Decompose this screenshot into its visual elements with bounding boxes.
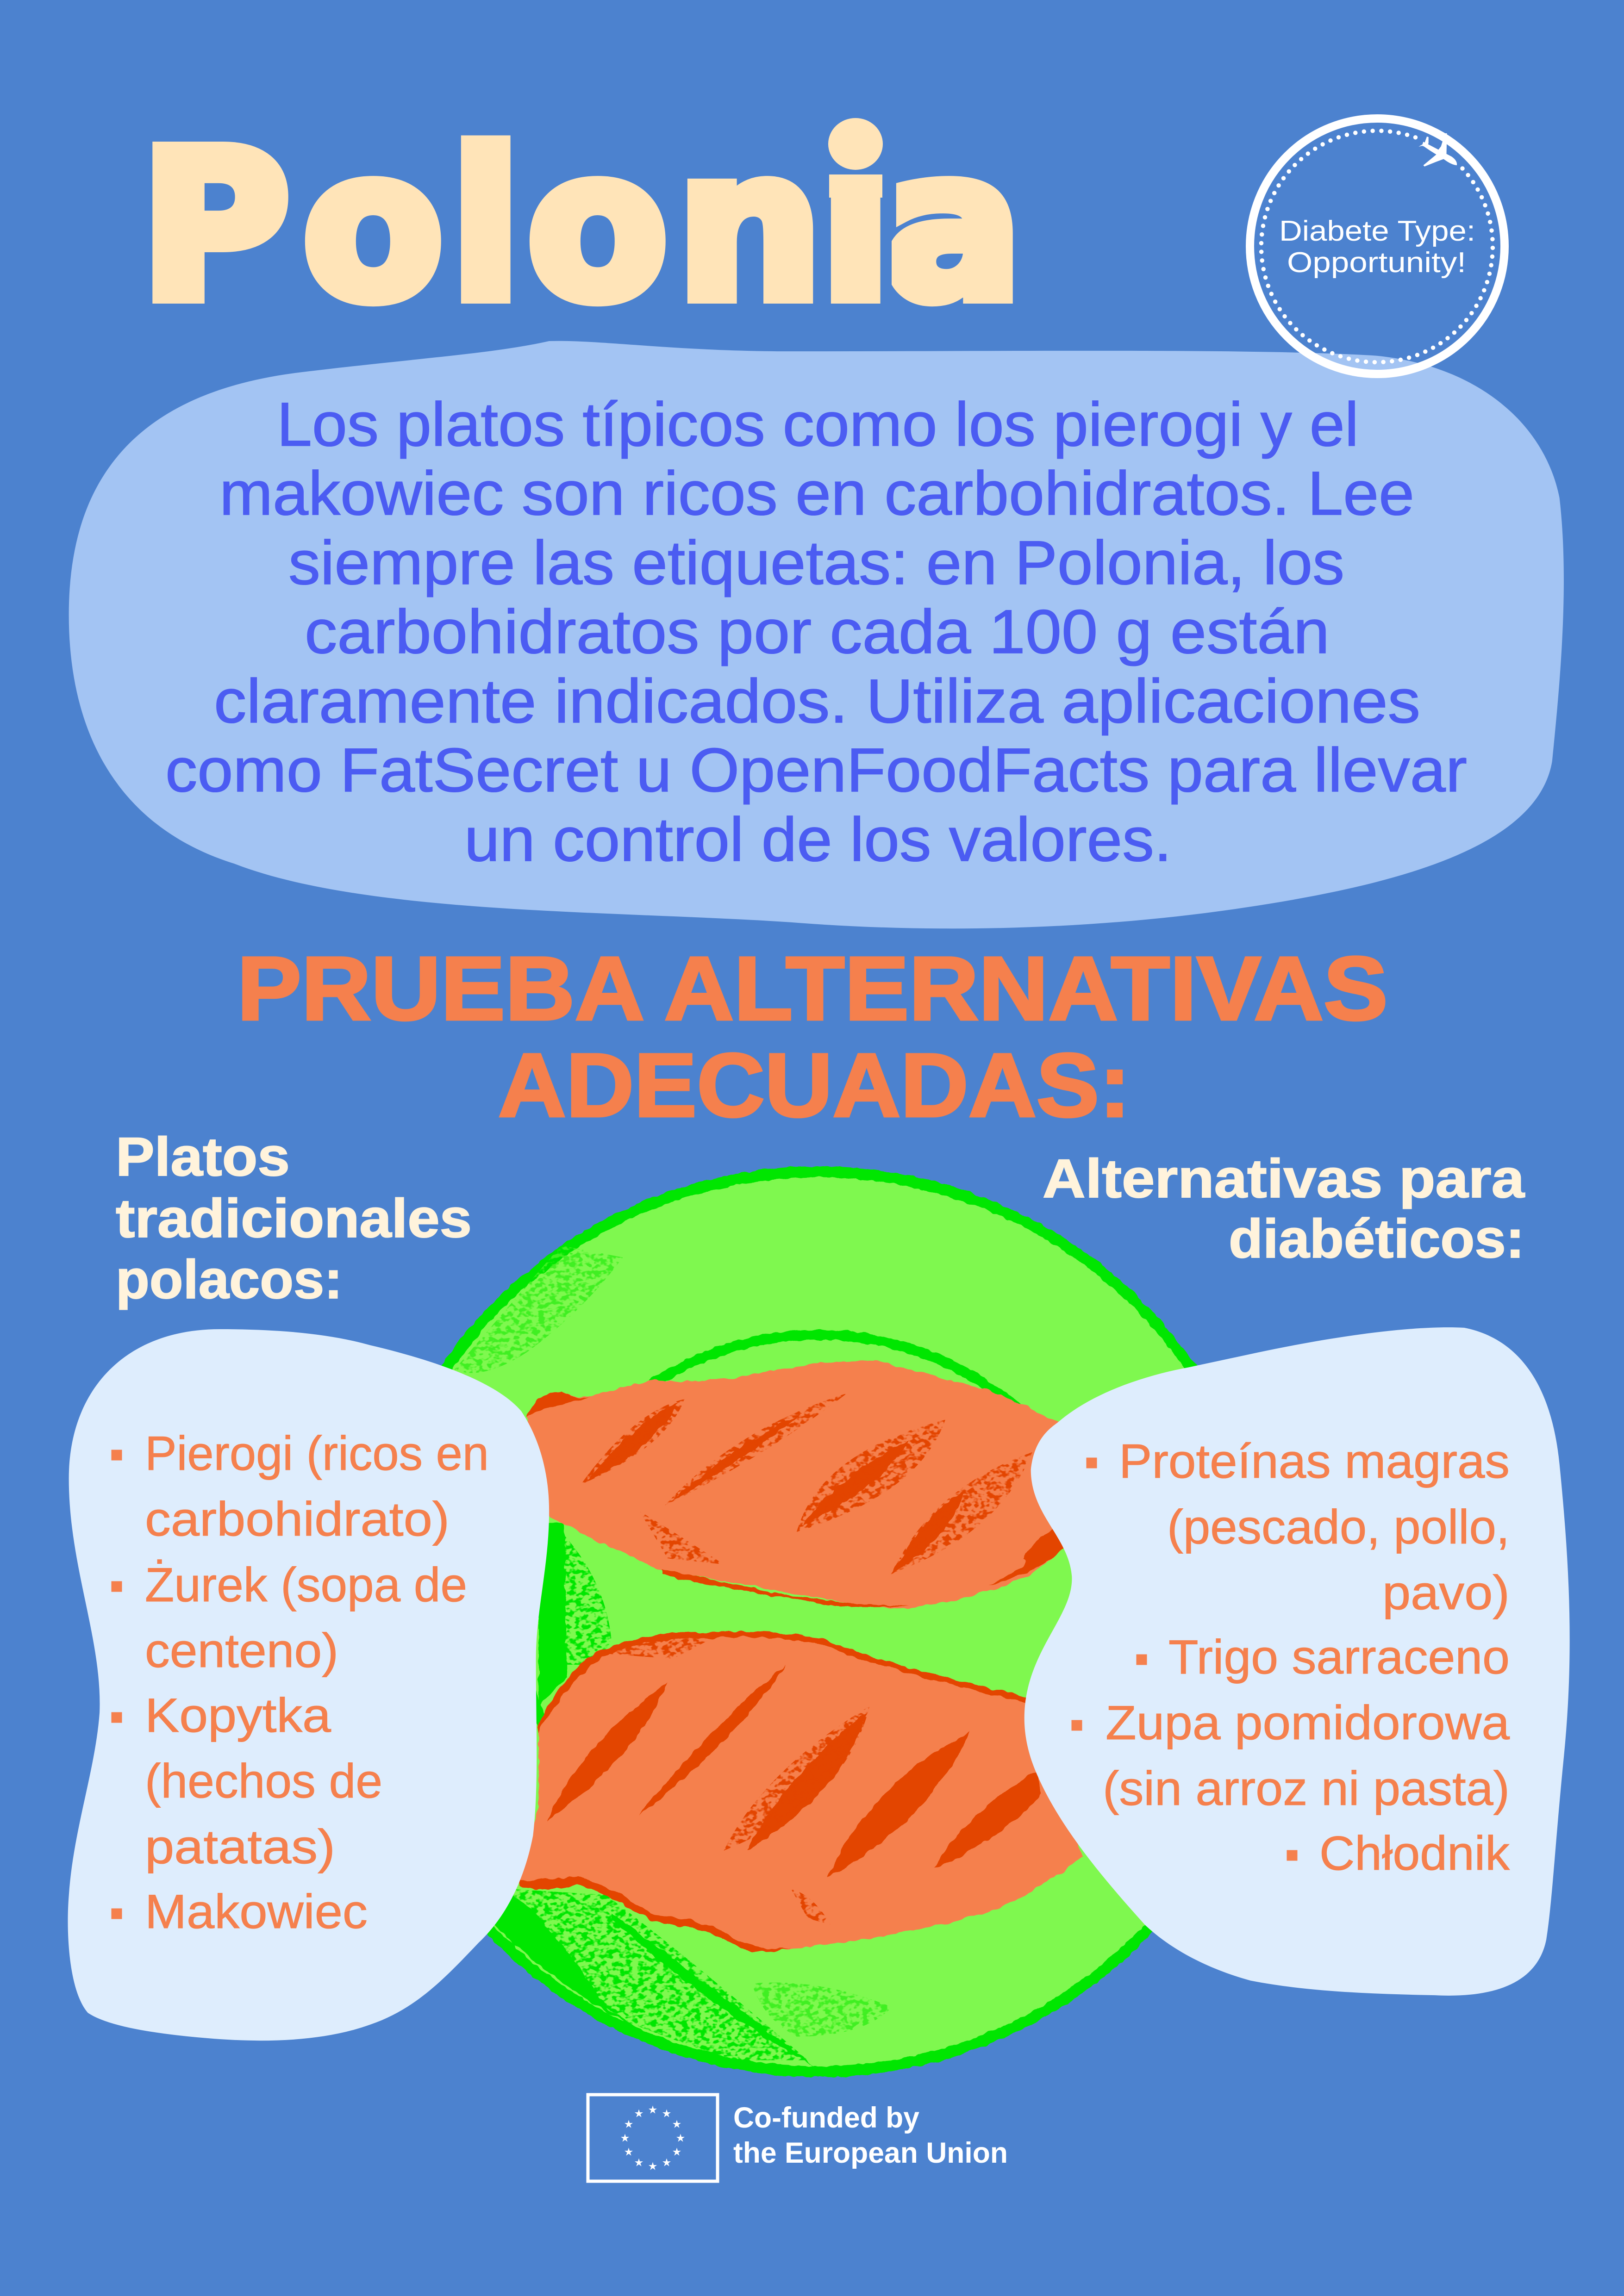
heading: traditional dishes: polacos: bbox=[116, 1249, 343, 1310]
icon: airplane bbox=[1418, 133, 1457, 167]
list: traditional dishes: patatas) bbox=[145, 1820, 335, 1874]
list: alternatives: (sin arroz ni pasta) bbox=[1103, 1762, 1510, 1816]
intro paragraph: Los platos típicos como los pierogi y el bbox=[277, 390, 1359, 459]
icon: EU flag bbox=[588, 2095, 718, 2181]
list: alternatives: pavo) bbox=[1382, 1566, 1510, 1620]
list: traditional dishes: carbohidrato) bbox=[145, 1493, 450, 1546]
badge text: Diabete Type: bbox=[1279, 215, 1475, 247]
title: Polonia bbox=[141, 108, 1022, 345]
EU funding text bbox=[733, 2102, 1008, 2169]
heading: traditional dishes bbox=[116, 1126, 472, 1310]
intro paragraph: carbohidratos por cada 100 g están bbox=[305, 597, 1330, 666]
intro paragraph: un control de los valores. bbox=[464, 805, 1172, 874]
list: alternatives: Zupa pomidorowa bbox=[1106, 1696, 1510, 1750]
illustration: plate with chicken bbox=[362, 1166, 1274, 2077]
chicken top bbox=[526, 1361, 1066, 1609]
list: traditional dishes: Makowiec bbox=[145, 1885, 368, 1939]
panel: intro text bbox=[69, 341, 1564, 928]
heading: traditional dishes: tradicionales bbox=[116, 1188, 472, 1249]
chicken bottom bbox=[519, 1631, 1083, 1952]
panel: traditional dishes list bbox=[68, 1329, 549, 2041]
EU funding text: the European Union bbox=[733, 2137, 1008, 2169]
list: alternatives: Proteínas magras bbox=[1119, 1435, 1510, 1488]
list: traditional dishes: Kopytka bbox=[145, 1689, 331, 1742]
list: alternatives: Trigo sarraceno bbox=[1168, 1630, 1510, 1684]
heading: try alternatives bbox=[237, 938, 1388, 1136]
panel: alternatives list bbox=[1024, 1327, 1570, 1996]
list: alternatives: Chłodnik bbox=[1319, 1827, 1510, 1880]
list: alternatives bbox=[1072, 1435, 1510, 1880]
heading: try alternatives: PRUEBA ALTERNATIVAS bbox=[237, 938, 1388, 1039]
heading: alternatives for diabetics bbox=[1043, 1148, 1525, 1269]
intro paragraph: siempre las etiquetas: en Polonia, los bbox=[288, 529, 1344, 597]
heading: alternatives for diabetics: diabéticos: bbox=[1229, 1208, 1524, 1269]
logo: EU co-funded bbox=[588, 2095, 1008, 2181]
intro paragraph: como FatSecret u OpenFoodFacts para llevar bbox=[165, 736, 1467, 805]
list: traditional dishes: (hechos de bbox=[145, 1755, 382, 1808]
list: traditional dishes: Żurek (sopa de bbox=[145, 1558, 467, 1612]
list: traditional dishes: Pierogi (ricos en bbox=[145, 1427, 489, 1481]
intro paragraph bbox=[165, 390, 1467, 874]
plate bbox=[362, 1166, 1274, 2077]
intro paragraph: makowiec son ricos en carbohidratos. Lee bbox=[219, 459, 1414, 528]
heading: try alternatives: ADECUADAS: bbox=[498, 1035, 1131, 1136]
intro paragraph: claramente indicados. Utiliza aplicaciones bbox=[214, 667, 1420, 736]
heading: alternatives for diabetics: Alternativas para bbox=[1043, 1148, 1525, 1209]
badge: Diabete Type Opportunity bbox=[1250, 118, 1505, 374]
list: traditional dishes bbox=[112, 1427, 489, 1939]
badge text bbox=[1279, 215, 1475, 279]
list: traditional dishes: centeno) bbox=[145, 1624, 338, 1678]
EU funding text: Co-funded by bbox=[733, 2102, 919, 2134]
plate brush texture bbox=[455, 1245, 892, 2066]
heading: traditional dishes: Platos bbox=[116, 1126, 290, 1188]
list: alternatives: (pescado, pollo, bbox=[1167, 1500, 1510, 1554]
badge text: Opportunity! bbox=[1287, 247, 1466, 279]
